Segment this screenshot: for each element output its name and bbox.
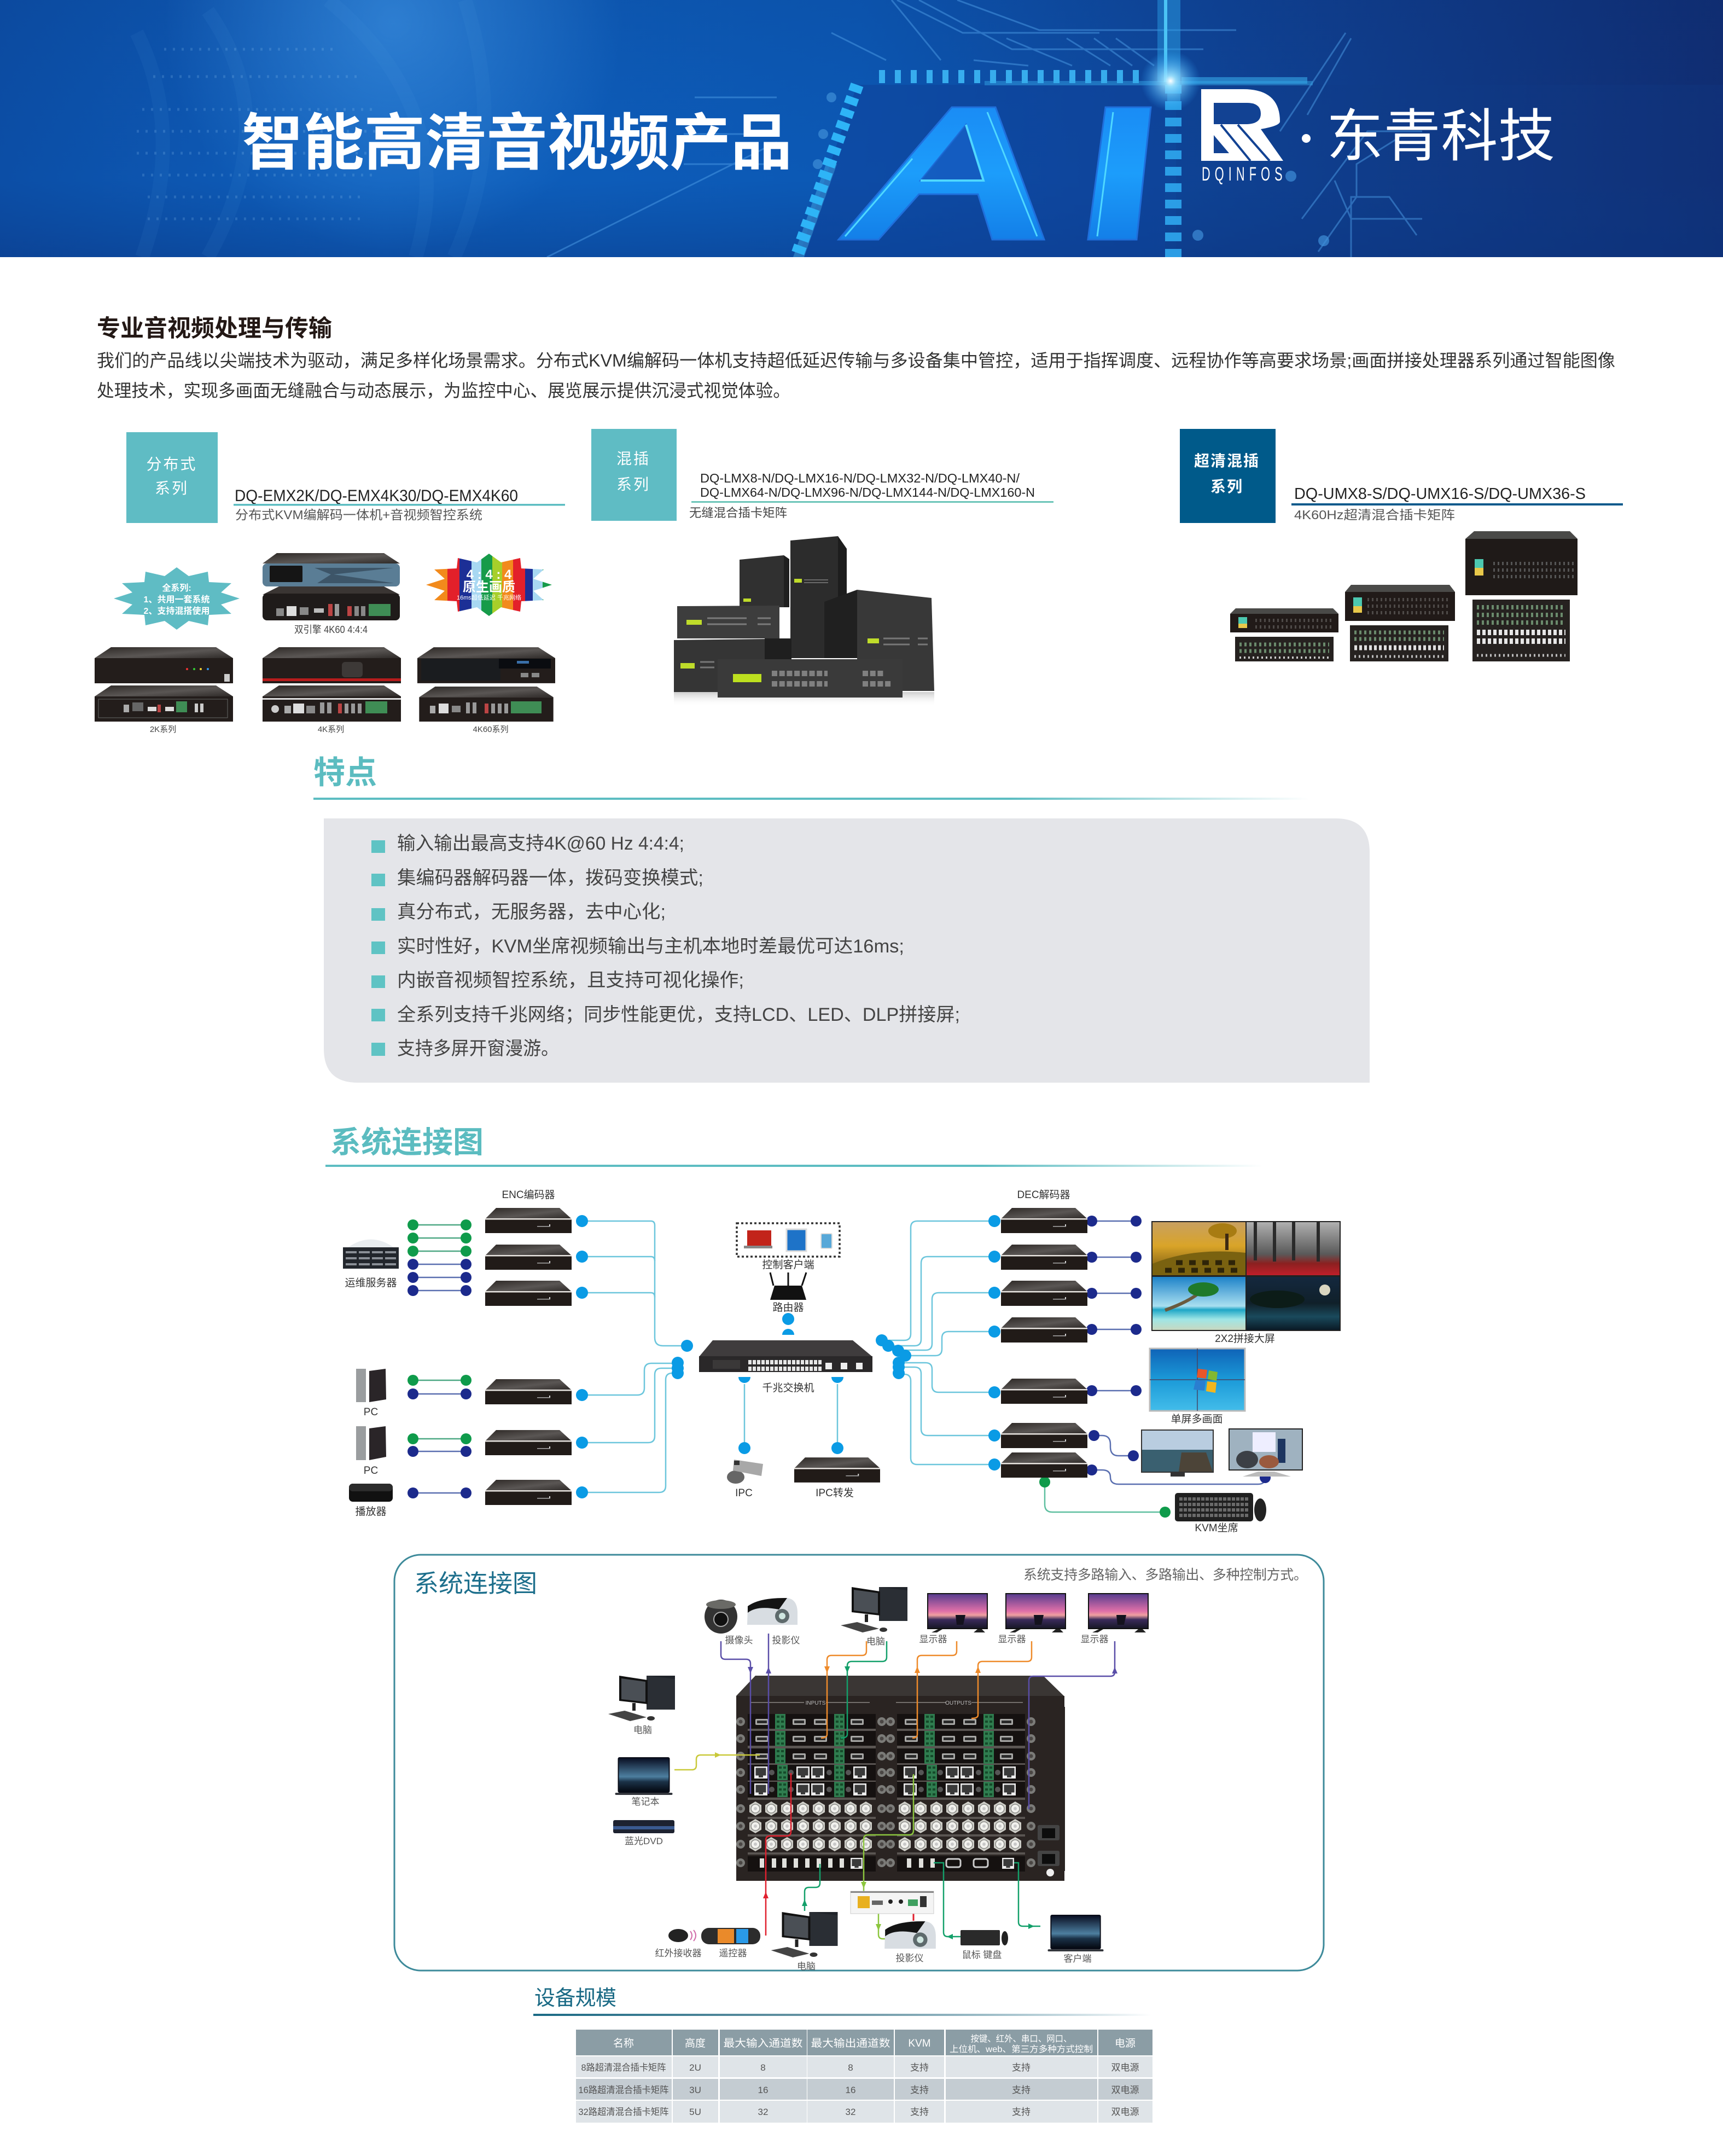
icon: 4:4:4 colour burst: 16ms超低延迟 千兆网络 xyxy=(457,594,521,601)
icon: bottom computer: 电脑 xyxy=(797,1961,816,1972)
icon: router xyxy=(770,1272,806,1314)
heading: features xyxy=(313,755,1309,800)
panel: distributed series: 分布式 xyxy=(146,456,197,473)
table rows xyxy=(576,2056,1152,2123)
label: projector top: 投影仪 xyxy=(772,1635,800,1646)
device: matrix chassis xyxy=(736,1676,1065,1881)
icon: receiver box xyxy=(851,1891,934,1914)
device: dual engine 4K60 xyxy=(263,553,400,635)
icon: projector top xyxy=(747,1598,798,1625)
icon: IR receiver xyxy=(655,1929,701,1959)
panel: features list: 全系列支持千兆网络；同步性能更优，支持LCD、LED、DLP拼接屏; xyxy=(397,1004,960,1025)
panel: ultra HD hybrid series: 系列 xyxy=(1210,478,1243,495)
heading: features: 特点 xyxy=(313,755,377,791)
icon: dome camera xyxy=(705,1600,737,1634)
icon: control clients: 控制客户端 xyxy=(762,1259,814,1271)
icon: projector bottom: 投影仪 xyxy=(896,1953,923,1963)
device: 2K series xyxy=(95,647,233,734)
table rows: 支持 xyxy=(910,2062,929,2073)
device: hybrid matrix family xyxy=(674,536,934,706)
device: IPC relay: IPC转发 xyxy=(816,1487,854,1499)
icon: computer top xyxy=(841,1587,907,1632)
display: single screen multi-view: 单屏多画面 xyxy=(1171,1413,1223,1425)
icon: media player: 播放器 xyxy=(355,1506,387,1518)
icon: KVM keyboard and mouse xyxy=(1175,1493,1266,1534)
icon: PC 2: PC xyxy=(364,1465,378,1477)
device: gigabit switch xyxy=(699,1340,872,1394)
wires: source and display links xyxy=(413,1221,1265,1493)
display: 2x2 video wall: 2X2拼接大屏 xyxy=(1215,1333,1275,1345)
arrowheads xyxy=(715,1666,1117,1939)
panel: features list: 集编码器解码器一体，拨码变换模式; xyxy=(397,868,703,888)
device: 4K series xyxy=(263,647,401,734)
panel: hybrid series: DQ-LMX64-N/DQ-LMX96-N/DQ-LMX144-N/DQ-LMX160-N xyxy=(700,485,1035,499)
icon: DQINFOS logo xyxy=(1201,89,1283,185)
table header: 高度 xyxy=(685,2037,706,2049)
icon: bottom computer xyxy=(771,1912,838,1972)
label: camera: 摄像头 xyxy=(725,1635,753,1646)
table header: 按键、红外、串口、网口、 xyxy=(970,2034,1072,2044)
table rows: 支持 xyxy=(910,2107,929,2117)
icon: control clients xyxy=(737,1223,840,1271)
icon: ops server xyxy=(343,1240,399,1289)
panel: hybrid series xyxy=(591,429,1053,706)
panel: distributed series xyxy=(95,432,565,734)
icon: router: 路由器 xyxy=(772,1301,804,1314)
icon: 4:4:4 colour burst: 4 : 4 : 4 xyxy=(467,567,512,582)
title: 智能高清音视频产品 xyxy=(242,109,792,177)
table header: 电源 xyxy=(1115,2037,1136,2049)
icon: PC 2 xyxy=(356,1426,386,1477)
chart: KVM network diagram xyxy=(343,1189,1341,1534)
label: decoders: DEC解码器 xyxy=(1017,1189,1070,1201)
panel: hybrid series: 混插 xyxy=(616,450,650,467)
icon: media player xyxy=(349,1484,393,1518)
callout: all series: 1、共用一套系统 xyxy=(144,594,209,605)
text block: system caption: 系统支持多路输入、多路输出、多种控制方式。 xyxy=(1023,1567,1307,1583)
icon: remote control: 遥控器 xyxy=(719,1948,747,1959)
icons: signal dots xyxy=(408,1216,1271,1518)
icon: left computer xyxy=(608,1676,675,1735)
icon: KVM keyboard and mouse: KVM坐席 xyxy=(1195,1522,1238,1534)
table header: KVM xyxy=(908,2038,931,2049)
icon: 4:4:4 colour burst xyxy=(426,554,552,616)
table rows: 5U xyxy=(689,2107,701,2117)
table rows: 16 xyxy=(846,2085,855,2095)
table rows: 8 xyxy=(848,2062,853,2073)
company name: 东青科技 xyxy=(1326,105,1555,168)
table rows: 8路超清混合插卡矩阵 xyxy=(581,2062,666,2073)
text block: intro: 处理技术，实现多画面无缝融合与动态展示，为监控中心、展览展示提供沉浸式视觉体验。 xyxy=(97,381,790,400)
panel: features list: 真分布式，无服务器，去中心化; xyxy=(397,902,666,922)
text block: intro: 我们的产品线以尖端技术为驱动，满足多样化场景需求。分布式KVM编解码一体机支持超低延迟传输与多设备集中管控，适用于指挥调度、远程协作等高要求场景;画面拼接处理器系列通过智能图像 xyxy=(97,351,1615,370)
device: IPC relay xyxy=(794,1457,880,1499)
wires: network links xyxy=(582,1221,994,1492)
table header xyxy=(576,2030,1152,2055)
table header: 上位机、web、第三方多种方式控制 xyxy=(950,2044,1093,2054)
table rows: 双电源 xyxy=(1111,2062,1139,2073)
icon: mouse and keyboard: 鼠标 键盘 xyxy=(962,1950,1002,1960)
table rows: 支持 xyxy=(910,2085,929,2095)
panel: features list: 支持多屏开窗漫游。 xyxy=(397,1038,559,1059)
panel: features list xyxy=(324,818,1370,1083)
device: 4K60 series xyxy=(417,647,555,734)
table rows: 双电源 xyxy=(1111,2085,1139,2095)
table rows: 支持 xyxy=(1012,2085,1031,2095)
icon: PC 1: PC xyxy=(364,1407,378,1418)
labels: displays: 显示器 xyxy=(998,1634,1026,1644)
icon: ops server: 运维服务器 xyxy=(345,1277,397,1289)
table rows: 32 xyxy=(758,2107,768,2117)
panel: hybrid series: DQ-LMX8-N/DQ-LMX16-N/DQ-LMX32-N/DQ-LMX40-N/ xyxy=(700,471,1020,485)
icons: encoder units xyxy=(485,1208,572,1505)
icon: IPC camera xyxy=(727,1460,763,1499)
display: single screen multi-view xyxy=(1150,1349,1245,1425)
table rows: 8 xyxy=(760,2062,766,2073)
panel: ultra HD hybrid series: 4K60Hz超清混合插卡矩阵 xyxy=(1294,508,1455,522)
heading: system diagram 1 xyxy=(325,1125,1262,1167)
labels: displays xyxy=(919,1634,1108,1644)
device: 4K series: 4K系列 xyxy=(318,725,344,734)
table rows: 3U xyxy=(689,2085,701,2095)
icon: mouse and keyboard xyxy=(961,1930,1008,1960)
panel: ultra HD hybrid series: DQ-UMX8-S/DQ-UMX16-S/DQ-UMX36-S xyxy=(1294,485,1586,503)
icon: notebook: 笔记本 xyxy=(631,1797,660,1807)
icon: remote control xyxy=(701,1928,760,1959)
table header: 最大输出通道数 xyxy=(811,2037,890,2049)
table rows: 32路超清混合插卡矩阵 xyxy=(579,2107,668,2117)
label: encoders: ENC编码器 xyxy=(502,1189,555,1201)
panel: features list: 内嵌音视频智控系统，且支持可视化操作; xyxy=(397,970,744,991)
icon: IR receiver: 红外接收器 xyxy=(655,1948,701,1959)
icon: notebook xyxy=(615,1757,673,1807)
display: 2x2 video wall xyxy=(1151,1221,1341,1345)
text block: intro xyxy=(97,351,1615,400)
table rows: 支持 xyxy=(1012,2062,1031,2073)
heading: system diagram 1: 系统连接图 xyxy=(330,1125,484,1159)
icon: Blu-ray DVD xyxy=(613,1820,674,1846)
table rows: 16路超清混合插卡矩阵 xyxy=(579,2085,668,2095)
panel: features list: 输入输出最高支持4K@60 Hz 4:4:4; xyxy=(397,833,684,854)
labels: displays: 显示器 xyxy=(1081,1634,1108,1644)
labels: displays: 显示器 xyxy=(919,1634,947,1644)
table rows: 32 xyxy=(846,2107,855,2117)
table rows: 16 xyxy=(758,2085,768,2095)
icon: displays xyxy=(927,1593,1149,1632)
icons: network dots xyxy=(576,1215,1000,1498)
device: gigabit switch: 千兆交换机 xyxy=(762,1382,814,1394)
panel: distributed series: 分布式KVM编解码一体机+音视频智控系统 xyxy=(235,508,482,522)
heading: device scale xyxy=(533,1987,1151,2016)
table rows: 双电源 xyxy=(1111,2107,1139,2117)
icon: PC 1 xyxy=(356,1369,386,1418)
display: monitor left xyxy=(1141,1429,1214,1477)
device: matrix chassis: OUTPUTS xyxy=(945,1700,971,1706)
table rows: 支持 xyxy=(1012,2107,1031,2117)
icon: 4:4:4 colour burst: 原生画质 xyxy=(463,580,515,595)
panel: ultra HD hybrid series xyxy=(1180,429,1623,661)
heading: device scale: 设备规模 xyxy=(534,1987,616,2010)
panel: ultra HD hybrid series: 超清混插 xyxy=(1194,452,1260,469)
panel: distributed series: 系列 xyxy=(155,480,189,497)
panel: features list: 实时性好，KVM坐席视频输出与主机本地时差最优可达16ms; xyxy=(397,936,904,957)
icons: decoder units xyxy=(1001,1208,1087,1478)
heading: intro: 专业音视频处理与传输 xyxy=(97,316,332,342)
icon: left computer: 电脑 xyxy=(633,1725,652,1735)
panel: distributed series: DQ-EMX2K/DQ-EMX4K30/DQ-EMX4K60 xyxy=(235,487,518,505)
device: 4K60 series: 4K60系列 xyxy=(473,725,509,734)
heading: system diagram 2: 系统连接图 xyxy=(414,1570,537,1597)
device: matrix chassis: INPUTS xyxy=(806,1700,826,1706)
panel: banner xyxy=(0,0,1723,257)
table rows: 2U xyxy=(689,2062,701,2073)
label: computer top: 电脑 xyxy=(866,1636,885,1647)
icon: client laptop xyxy=(1048,1915,1104,1964)
callout: all series: 2、支持混搭使用 xyxy=(144,606,209,616)
device: dual engine 4K60: 双引擎 4K60 4:4:4 xyxy=(294,624,368,635)
arrows: signal wiring xyxy=(674,1634,1115,1939)
icon: AI letters xyxy=(839,107,1151,240)
callout: all series: 全系列: xyxy=(162,583,191,593)
display: monitor right xyxy=(1229,1428,1303,1477)
device: 2K series: 2K系列 xyxy=(150,725,176,734)
callout: all series xyxy=(114,567,240,630)
icon: DQINFOS logo: DQINFOS xyxy=(1202,164,1283,185)
panel: hybrid series: 系列 xyxy=(616,476,650,493)
panel: system diagram 2 xyxy=(394,1555,1324,1972)
table: device scale xyxy=(576,2030,1152,2123)
icon: IPC camera: IPC xyxy=(735,1487,753,1499)
icon: client laptop: 客户端 xyxy=(1063,1954,1092,1964)
icon: Blu-ray DVD: 蓝光DVD xyxy=(625,1836,663,1846)
table header: 最大输入通道数 xyxy=(723,2037,803,2049)
icon: projector bottom xyxy=(884,1921,936,1963)
device: ultra HD matrix family xyxy=(1230,531,1578,661)
panel: hybrid series: 无缝混合插卡矩阵 xyxy=(689,506,787,520)
table header: 名称 xyxy=(613,2037,634,2049)
